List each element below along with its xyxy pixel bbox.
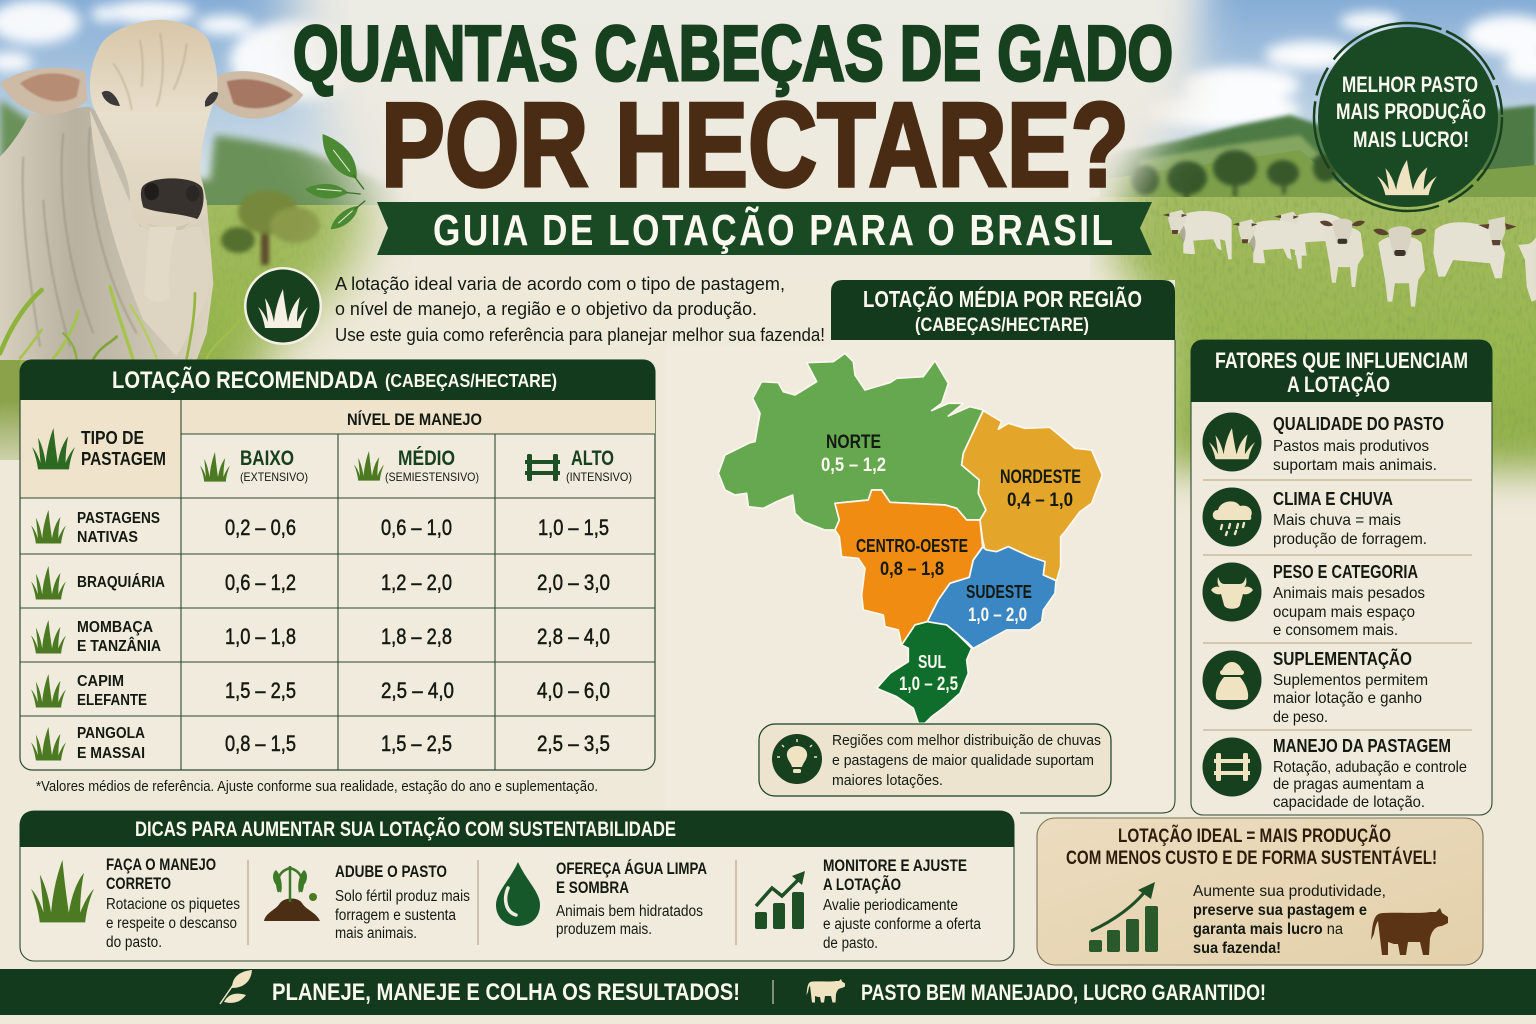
seal: melhor pasto: MAIS PRODUÇÃO [1336,99,1486,124]
factor: suplementacao: Suplementos permitem [1273,672,1428,689]
factor: suplementacao: maior lotação e ganho [1273,690,1422,707]
herd of white cattle [1163,210,1536,307]
icon: leaf sprig [220,970,252,1004]
factor: clima e chuva: Mais chuva = mais [1273,512,1401,529]
title line 2: POR HECTARE? [381,78,1129,212]
tip: agua limpa: produzem mais. [556,921,652,938]
row: braquiaria: BRAQUIÁRIA [77,572,165,591]
row: mombaca e tanzania: MOMBAÇA [77,619,153,636]
left landscape scene [0,0,396,368]
tips header: DICAS PARA AUMENTAR SUA LOTAÇÃO COM SUSTENTABILIDADE [135,818,676,841]
left grass edge strip [0,340,22,490]
column heading: alto [525,447,632,484]
tip: manejo correto [31,855,240,951]
tip: adube o pasto: forragem e sustenta [335,907,456,924]
table header: LOTAÇÃO RECOMENDADA [112,366,378,394]
row: pastagens nativas: PASTAGENS [77,510,160,527]
seal: melhor pasto: MAIS LUCRO! [1353,127,1469,152]
column heading: baixo: BAIXO [240,447,294,470]
panel: ideal stocking message [1037,818,1483,965]
factor: qualidade do pasto: Pastos mais produtivos [1273,438,1429,455]
panel: tips [20,811,1014,961]
row: mombaca e tanzania: 2,8 – 4,0 [537,624,610,649]
region label: sudeste: 1,0 – 2,0 [968,605,1027,626]
map panel header: (CABEÇAS/HECTARE) [915,315,1089,336]
tip: adube o pasto: ADUBE O PASTO [335,862,447,881]
tips header [20,811,1014,847]
row: pastagens nativas: 1,0 – 1,5 [538,515,609,540]
footer bar: PASTO BEM MANEJADO, LUCRO GARANTIDO! [861,980,1266,1005]
panel: ideal stocking message: COM MENOS CUSTO E DE FORMA SUSTENTÁVEL! [1066,847,1437,869]
factor: manejo da pastagem: capacidade de lotação. [1273,794,1425,811]
tip: agua limpa: Animais bem hidratados [556,903,703,920]
column heading: baixo: (EXTENSIVO) [240,470,308,484]
tip: monitore e ajuste [755,856,981,952]
column heading: tipo de pastagem [32,428,166,469]
callout: rain distribution: maiores lotações. [832,772,943,789]
icon: decorative leaves [305,134,365,229]
tip: agua limpa: E SOMBRA [556,878,629,897]
seal: melhor pasto [1314,23,1502,211]
factor: manejo da pastagem [1202,736,1467,811]
panel: ideal stocking message: garanta mais lucro na [1193,921,1343,938]
row: pastagens nativas [31,510,609,546]
row: capim elefante [31,673,610,709]
row: braquiaria [31,566,610,600]
footer bar [0,969,1536,1015]
region label: norte: NORTE [826,432,881,453]
intro text: A lotação ideal varia de acordo com o tipo de pastagem, [335,274,785,294]
region label: nordeste: NORDESTE [1000,467,1081,488]
map panel header [831,280,1175,340]
factors header: A LOTAÇÃO [1287,372,1390,397]
panel: factors [1191,340,1492,815]
row: capim elefante: 4,0 – 6,0 [537,678,610,703]
factor: peso e categoria: e consomem mais. [1273,622,1398,639]
factor: clima e chuva: CLIMA E CHUVA [1273,489,1393,509]
icon: intro grass badge [244,267,322,345]
row: pangola e massai: PANGOLA [77,725,145,742]
tip: manejo correto: FAÇA O MANEJO [106,855,216,874]
column heading: alto: (INTENSIVO) [566,470,632,484]
table header [20,360,655,400]
region label: sul: 1,0 – 2,5 [899,674,958,695]
region label: centro-oeste: 0,8 – 1,8 [880,559,944,580]
column heading: baixo [200,447,308,484]
callout: rain distribution: e pastagens de maior qualidade suportam [832,752,1094,769]
panel: regional map [665,280,1175,813]
tip: monitore e ajuste: Avalie periodicamente [823,897,958,914]
region label: nordeste [1000,467,1081,511]
region label: nordeste: 0,4 – 1,0 [1007,490,1073,511]
factor: clima e chuva [1202,488,1427,548]
tip: monitore e ajuste: e ajuste conforme a oferta [823,916,981,933]
intro text: Use este guia como referência para planejar melhor sua fazenda! [335,325,825,345]
panel: ideal stocking message: preserve sua pastagem e [1193,902,1367,919]
tip: agua limpa [496,859,707,938]
factor: manejo da pastagem: de pragas aumentam a [1273,776,1424,793]
row: braquiaria: 1,2 – 2,0 [381,570,452,595]
factor: clima e chuva: produção de forragem. [1273,531,1427,548]
tip: monitore e ajuste: MONITORE E AJUSTE [823,856,967,875]
row: capim elefante: 2,5 – 4,0 [381,678,454,703]
factor: peso e categoria: Animais mais pesados [1273,585,1425,602]
factor: qualidade do pasto [1202,412,1444,474]
heading: nivel de manejo: NÍVEL DE MANEJO [347,410,482,429]
map of Brazil [718,353,1102,723]
column heading: tipo de pastagem: TIPO DE [81,428,144,448]
row: capim elefante: 1,5 – 2,5 [225,678,296,703]
factor: peso e categoria: PESO E CATEGORIA [1273,562,1418,582]
tip: manejo correto: CORRETO [106,874,171,893]
region label: sul [899,652,958,695]
region label: sudeste [966,582,1032,626]
tip: adube o pasto: mais animais. [335,925,417,942]
factor: suplementacao [1202,648,1428,726]
tip: manejo correto: e respeite o descanso [106,915,237,932]
icon: growth chart [1089,882,1158,952]
footer bar: PLANEJE, MANEJE E COLHA OS RESULTADOS! [272,979,740,1006]
panel: ideal stocking message: sua fazenda! [1193,940,1281,957]
seal: melhor pasto: MELHOR PASTO [1342,72,1478,97]
row: pastagens nativas: 0,2 – 0,6 [225,515,296,540]
row: pangola e massai: 2,5 – 3,5 [537,731,610,756]
region label: centro-oeste [856,536,968,580]
row: capim elefante: ELEFANTE [77,692,147,709]
factor: suplementacao: SUPLEMENTAÇÃO [1273,648,1412,669]
column heading: medio: MÉDIO [398,447,455,470]
factor: qualidade do pasto: suportam mais animais. [1273,457,1437,474]
row: mombaca e tanzania: 1,8 – 2,8 [381,624,452,649]
big cow portrait [0,20,303,360]
tip: adube o pasto: Solo fértil produz mais [335,888,470,905]
factor: peso e categoria: ocupam mais espaço [1273,604,1415,621]
row: pangola e massai: 0,8 – 1,5 [225,731,296,756]
factor: peso e categoria [1202,562,1425,639]
intro text [335,274,825,345]
region label: sudeste: SUDESTE [966,582,1032,602]
region label: norte [821,432,886,476]
tip: agua limpa: OFEREÇA ÁGUA LIMPA [556,859,707,878]
callout: rain distribution: Regiões com melhor distribuição de chuvas [832,732,1101,749]
column heading: alto: ALTO [571,447,614,470]
column heading: medio: (SEMIESTENSIVO) [385,470,479,484]
title line 1: QUANTAS CABEÇAS DE GADO [293,9,1173,97]
intro text: o nível de manejo, a região e o objetivo da produção. [335,299,757,319]
tip: manejo correto: do pasto. [106,934,162,951]
row: capim elefante: CAPIM [77,673,124,690]
factor: qualidade do pasto: QUALIDADE DO PASTO [1273,414,1444,434]
row: mombaca e tanzania: E TANZÂNIA [77,636,161,655]
row: pangola e massai [31,725,610,762]
tip: manejo correto: Rotacione os piquetes [106,896,240,913]
region label: norte: 0,5 – 1,2 [821,455,886,476]
column heading: medio [354,447,479,484]
tip: monitore e ajuste: de pasto. [823,935,878,952]
panel: recommended stocking table [20,360,655,770]
row: pangola e massai: 1,5 – 2,5 [381,731,452,756]
region label: sul: SUL [918,652,946,672]
factors header: FATORES QUE INFLUENCIAM [1215,348,1468,373]
column heading: tipo de pastagem: PASTAGEM [81,449,166,469]
tip: monitore e ajuste: A LOTAÇÃO [823,874,901,894]
factor: manejo da pastagem: MANEJO DA PASTAGEM [1273,736,1451,756]
factors header [1191,340,1492,402]
row: pastagens nativas: NATIVAS [77,529,138,546]
footnote: *Valores médios de referência. Ajuste conforme sua realidade, estação do ano e suplementação. [36,779,598,795]
row: mombaca e tanzania [31,619,610,655]
subtitle ribbon: GUIA DE LOTAÇÃO PARA O BRASIL [433,204,1113,255]
right landscape scene [1090,0,1536,537]
panel: ideal stocking message: Aumente sua produtividade, [1193,883,1386,900]
panel: ideal stocking message: LOTAÇÃO IDEAL = MAIS PRODUÇÃO [1118,825,1391,847]
icon: brown cow [1371,908,1448,955]
region label: centro-oeste: CENTRO-OESTE [856,536,968,556]
table header: (CABEÇAS/HECTARE) [385,371,557,391]
factor: manejo da pastagem: Rotação, adubação e controle [1273,759,1467,776]
callout: rain distribution [759,724,1111,796]
row: braquiaria: 0,6 – 1,2 [225,570,296,595]
row: mombaca e tanzania: 1,0 – 1,8 [225,624,296,649]
map panel header: LOTAÇÃO MÉDIA POR REGIÃO [863,285,1142,312]
row: pastagens nativas: 0,6 – 1,0 [381,515,452,540]
icon: cream cow [806,979,845,1002]
tip: adube o pasto [264,862,470,942]
row: pangola e massai: E MASSAI [77,745,145,762]
factor: suplementacao: de peso. [1273,709,1328,726]
row: braquiaria: 2,0 – 3,0 [537,570,610,595]
